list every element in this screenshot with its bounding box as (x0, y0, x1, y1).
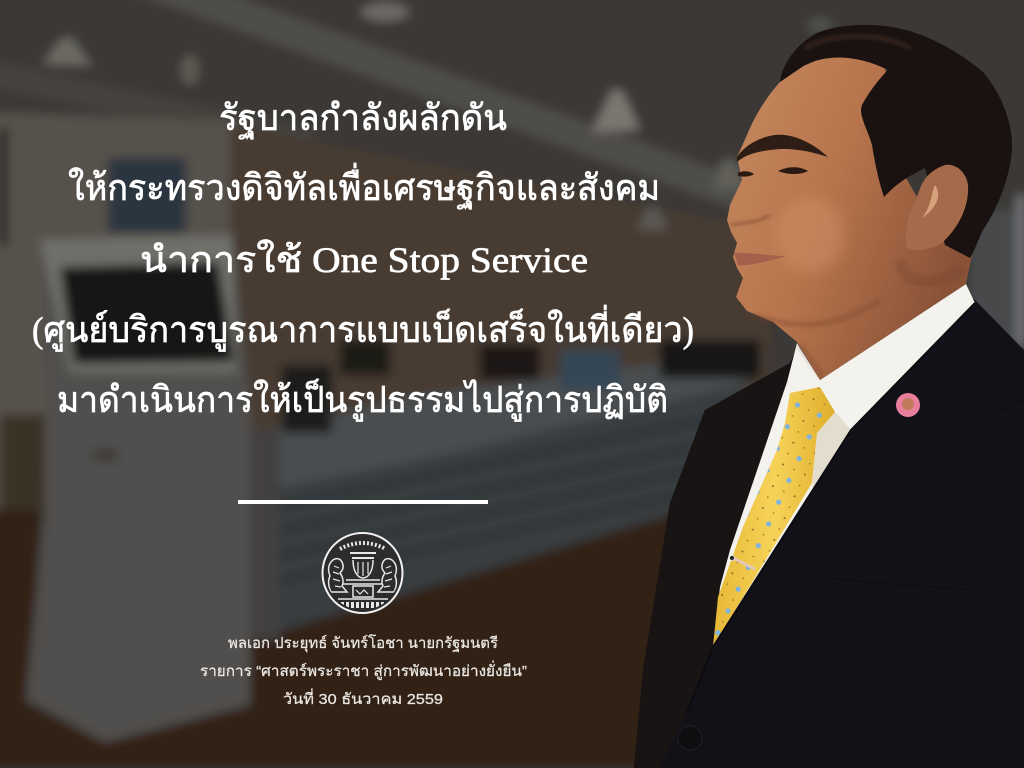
lapel notch and pocket lines (825, 400, 1024, 590)
caption text: วันที่ 30 ธันวาคม 2559 (283, 688, 443, 708)
caption text: รายการ “ศาสตร์พระราชา สู่การพัฒนาอย่างยั่งยืน” (200, 660, 527, 680)
eyebrow (737, 135, 828, 162)
hair (780, 25, 1012, 258)
eyes (738, 167, 808, 177)
lapel edge (687, 303, 975, 713)
hair sheen (805, 36, 910, 48)
cheek highlight (776, 197, 844, 273)
neck shadow (900, 260, 965, 282)
suit jacket (634, 298, 1024, 768)
icon: government seal (322, 533, 402, 613)
left jacket panel (634, 363, 790, 768)
main headline (32, 98, 694, 422)
shirt shadow (812, 412, 851, 490)
tie clip (730, 556, 755, 569)
ear (906, 165, 968, 250)
main headline: (ศูนย์บริการบูรณาการแบบเบ็ดเสร็จในที่เดียว) (32, 305, 694, 352)
portrait: man in profile (634, 25, 1024, 768)
lapel pin (896, 393, 920, 417)
main headline: ให้กระทรวงดิจิทัลเพื่อเศรษฐกิจและสังคม (68, 163, 660, 210)
jaw shadow (752, 300, 880, 376)
mouth (734, 253, 786, 265)
caption text (200, 634, 527, 708)
face and neck (727, 50, 972, 380)
nose shade (731, 215, 770, 225)
ear detail (922, 185, 938, 218)
divider line (238, 500, 488, 504)
caption text: พลเอก ประยุทธ์ จันทร์โอชา นายกรัฐมนตรี (228, 634, 498, 653)
main headline: มาดำเนินการให้เป็นรูปธรรมไปสู่การปฏิบัติ (57, 377, 668, 422)
main headline: นำการใช้ One Stop Service (140, 239, 588, 280)
shirt and collar (713, 284, 975, 647)
necktie (713, 387, 835, 647)
jacket button (678, 726, 702, 750)
main headline: รัฐบาลกำลังผลักดัน (219, 98, 507, 140)
